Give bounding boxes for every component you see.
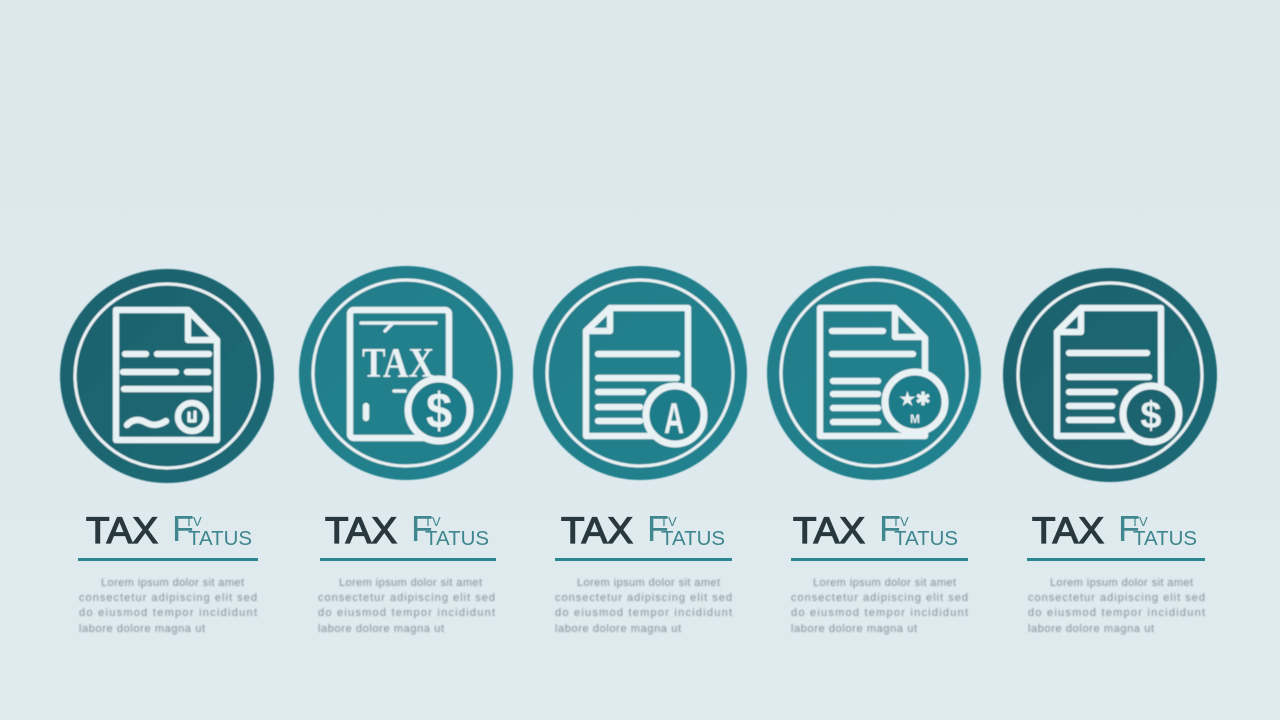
- heading: [561, 508, 725, 551]
- heading: TATUS: [425, 528, 489, 550]
- heading: TATUS: [188, 528, 252, 550]
- icon: document with dollar badge: $: [1140, 395, 1162, 437]
- body text: consectetur adipiscing elit sed: [555, 592, 732, 604]
- body text: [318, 577, 495, 635]
- heading: F: [647, 508, 669, 549]
- icon: document with letter badge: [533, 266, 747, 480]
- body text: labore dolore magna ut: [318, 623, 444, 635]
- body text: consectetur adipiscing elit sed: [318, 592, 495, 604]
- body text: [555, 577, 732, 635]
- icon: document with signature and stamp: [60, 269, 274, 483]
- body text: [791, 577, 968, 635]
- heading: F: [879, 508, 901, 549]
- body text: Lorem ipsum dolor sit amet: [101, 577, 244, 589]
- heading: TATUS: [1133, 528, 1197, 550]
- body text: Lorem ipsum dolor sit amet: [339, 577, 482, 589]
- body text: do eiusmod tempor incididunt: [555, 607, 732, 619]
- icon: document with seal badge: [767, 266, 981, 480]
- body text: labore dolore magna ut: [555, 623, 681, 635]
- body text: do eiusmod tempor incididunt: [79, 607, 257, 619]
- heading: TAX: [325, 510, 397, 551]
- heading: [86, 508, 252, 551]
- body text: [79, 577, 257, 635]
- icon: document with letter badge: A: [664, 394, 684, 443]
- body text: labore dolore magna ut: [79, 623, 205, 635]
- icon: tax form with dollar coin: $: [426, 383, 452, 439]
- column 2: tax form with dollar coin: [299, 266, 513, 635]
- icon: document with dollar badge: [1003, 268, 1217, 482]
- heading: F: [411, 508, 433, 549]
- body text: do eiusmod tempor incididunt: [318, 607, 495, 619]
- heading: TV: [1131, 514, 1148, 529]
- heading: TAX: [793, 510, 865, 551]
- body text: Lorem ipsum dolor sit amet: [1050, 577, 1193, 589]
- heading: TV: [185, 514, 202, 529]
- body text: do eiusmod tempor incididunt: [1028, 607, 1205, 619]
- body text: Lorem ipsum dolor sit amet: [813, 577, 956, 589]
- column 3: document with letter badge: [533, 266, 747, 635]
- heading: TAX: [1032, 510, 1104, 551]
- body text: do eiusmod tempor incididunt: [791, 607, 968, 619]
- column 5: document with dollar badge: [1003, 268, 1217, 635]
- heading: TATUS: [661, 528, 725, 550]
- icon: tax form with dollar coin: TAX: [362, 341, 434, 387]
- body text: Lorem ipsum dolor sit amet: [577, 577, 720, 589]
- heading: TAX: [561, 510, 633, 551]
- body text: consectetur adipiscing elit sed: [791, 592, 968, 604]
- icon: tax form with dollar coin: [299, 266, 513, 480]
- body text: consectetur adipiscing elit sed: [79, 592, 257, 604]
- heading: [793, 508, 958, 551]
- body text: consectetur adipiscing elit sed: [1028, 592, 1205, 604]
- icon: document with seal badge: ★✱: [899, 389, 931, 409]
- heading: F: [172, 508, 194, 549]
- heading: F: [1118, 508, 1140, 549]
- column 4: document with seal badge: [767, 266, 981, 635]
- heading: [1032, 508, 1197, 551]
- icon: document with seal badge: M: [910, 412, 920, 426]
- column 1: tax status: [60, 269, 274, 635]
- heading: TV: [660, 514, 677, 529]
- heading: TATUS: [894, 528, 958, 550]
- body text: labore dolore magna ut: [791, 623, 917, 635]
- heading: TV: [424, 514, 441, 529]
- heading: [325, 508, 489, 551]
- heading: TAX: [86, 510, 158, 551]
- body text: labore dolore magna ut: [1028, 623, 1154, 635]
- heading: TV: [892, 514, 909, 529]
- body text: [1028, 577, 1205, 635]
